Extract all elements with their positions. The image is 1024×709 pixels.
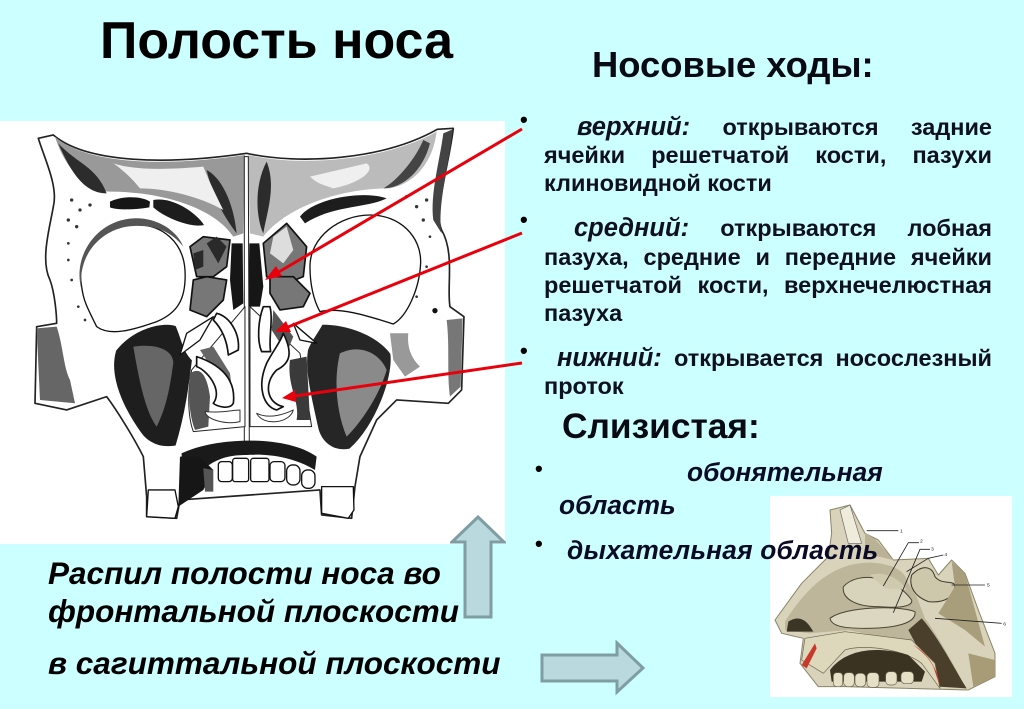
bullet list: mucosa regions: •	[535, 531, 543, 556]
frontal bone shading	[55, 137, 245, 237]
bullet list: nasal passages	[520, 107, 992, 399]
nasal cavity dark septum area	[230, 243, 243, 310]
title: Полость носа	[100, 12, 453, 70]
bullet list: nasal passages: •	[520, 207, 528, 232]
bullet list: mucosa regions: •	[535, 456, 543, 481]
bullet list: nasal passages: решетчатой кости, верхнечелюстная	[544, 272, 992, 298]
caption: frontal section: фронтальной плоскости	[48, 593, 459, 629]
bullet list: nasal passages: проток	[544, 373, 624, 399]
nasal conchae	[197, 357, 234, 407]
bullet list: nasal passages: •	[520, 338, 528, 363]
oral cavity	[830, 650, 925, 682]
bullet list: nasal passages: средний: открываются лобная	[574, 214, 992, 242]
bullet list: nasal passages: верхний: открываются задние	[577, 113, 992, 141]
caption: frontal section	[48, 555, 459, 629]
pointer: inferior passage	[282, 363, 522, 402]
pointer: superior passage	[265, 129, 522, 280]
bones and outer silhouette	[775, 505, 995, 690]
panel: frontal section of skull	[0, 121, 505, 544]
nasal cavity interior	[785, 563, 967, 690]
bullet list: nasal passages: пазуха, средние и передние ячейки	[544, 244, 992, 270]
panel: sagittal section image: 2	[920, 539, 923, 545]
caption: sagittal section: в сагиттальной плоскости	[48, 645, 501, 681]
nasal cavity	[189, 307, 245, 432]
panel: sagittal section image: 6	[1003, 621, 1006, 627]
bullet list: nasal passages: пазуха	[544, 300, 622, 326]
frontal sinuses	[110, 197, 150, 209]
zygomatic parts	[37, 327, 75, 403]
heading: mucosa: Слизистая:	[562, 407, 760, 446]
bullet list: nasal passages: нижний: открывается носослезный	[557, 344, 992, 372]
maxillary sinuses	[113, 323, 193, 448]
label lines and numbers	[867, 531, 1002, 623]
stippled bone	[67, 195, 431, 321]
conchae	[843, 577, 912, 607]
panel: sagittal section image: 1	[900, 529, 903, 535]
bullet list: mucosa regions: область	[559, 490, 676, 520]
skull outline	[35, 128, 464, 518]
sphenoid sinus	[911, 568, 955, 602]
palate and teeth	[182, 441, 317, 500]
bullet list: mucosa regions: дыхательная область	[567, 535, 878, 565]
caption: frontal section: Распил полости носа во	[48, 555, 441, 591]
ethmoid cells	[190, 223, 310, 317]
arrow: up to frontal section	[450, 515, 506, 618]
bullet list: nasal passages: клиновидной кости	[544, 170, 772, 196]
bullet list: mucosa regions	[535, 456, 883, 565]
bullet list: nasal passages: ячейки решетчатой кости, пазухи	[544, 142, 992, 168]
palate	[802, 632, 940, 688]
panel: sagittal section image: 3	[931, 546, 934, 552]
panel: sagittal section image: 5	[987, 583, 990, 589]
spongy bone	[938, 562, 985, 647]
panel: sagittal section image: 4	[944, 552, 947, 558]
pointer: middle passage	[275, 233, 522, 332]
panel: sagittal section image	[770, 496, 1012, 697]
teeth	[833, 672, 914, 687]
bullet list: mucosa regions: обонятельная	[687, 457, 883, 487]
heading: nasal passages: Носовые ходы:	[592, 44, 874, 85]
arrow: right to sagittal section	[540, 640, 645, 696]
bullet list: nasal passages: •	[520, 107, 528, 132]
orbits	[81, 225, 185, 332]
